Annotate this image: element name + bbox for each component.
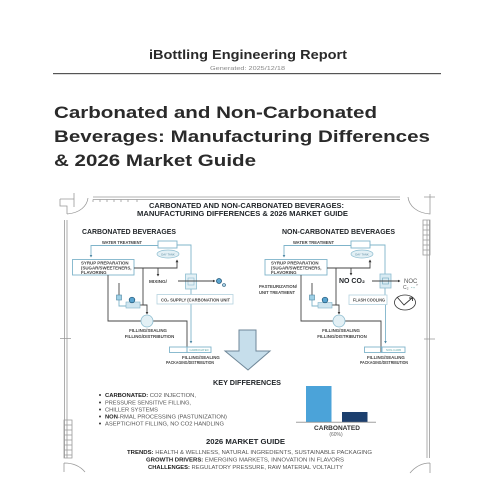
valve and pump icon xyxy=(116,295,140,308)
heading: non-carbonated beverages: NON-CARBONATED BEVERAGES xyxy=(282,227,395,236)
report header: Generated: 2025/12/18 xyxy=(210,66,285,72)
key differences list xyxy=(99,393,227,428)
cooling unit icon xyxy=(372,274,400,288)
no carbon label: ₂ᵧ xyxy=(416,282,418,286)
diagram heading xyxy=(137,201,348,218)
report header: iBottling Engineering Report xyxy=(149,48,348,62)
syrup preparation box: FLAVORING xyxy=(271,270,297,275)
no carbon label: ᵃ ᵠ xyxy=(411,286,415,290)
syrup preparation box: FLAVORING xyxy=(81,270,107,275)
no carbon label: C₂ xyxy=(403,285,409,291)
day tank xyxy=(351,250,373,258)
filling mixer node xyxy=(125,315,174,339)
co2 molecule icon xyxy=(216,278,226,286)
syrup preparation box: SYRUP PREPARATION xyxy=(81,260,129,266)
day tank: DAY TANK xyxy=(355,252,369,256)
day tank xyxy=(157,250,179,258)
diagram heading: CARBONATED AND NON-CARBONATED BEVERAGES: xyxy=(149,201,344,210)
water treatment step: WATER TREATMENT xyxy=(102,240,142,245)
market guide text: CHALLENGES: REGULATORY PRESSURE, RAW MATERIAL VOLTALITY xyxy=(148,465,343,471)
pasteurization label xyxy=(259,284,298,295)
water treatment step: WATER TREATMENT xyxy=(293,240,334,245)
blueprint frame xyxy=(60,193,435,473)
packaging station: NON-CARB xyxy=(386,348,401,352)
filling mixer node: FILLING/SEALING xyxy=(129,328,167,333)
packaging station: FILLING/SEALING xyxy=(367,355,405,360)
filling mixer node: FILLING/DISTRIBUTION xyxy=(125,334,174,339)
water treatment step xyxy=(284,240,370,257)
market guide text xyxy=(127,450,372,471)
key differences heading: KEY DIFFERENCES xyxy=(213,378,281,387)
pasteurization label: PASTEURIZATION/ xyxy=(259,284,298,289)
no co2 label: NO CO₂ xyxy=(339,276,365,285)
pasteurization label: UNIT TREATMENT xyxy=(259,290,295,295)
title: Beverages: Manufacturing Differences xyxy=(54,127,430,146)
packaging station: FILLING/SEALING xyxy=(182,355,220,360)
report header xyxy=(53,48,441,74)
flash cooling box: FLASH COOLING xyxy=(353,298,386,302)
key differences list: NON-RMAL PROCESSING (PASTUNIZATION) xyxy=(105,414,227,420)
no gas icon xyxy=(394,295,416,310)
market guide heading: 2026 MARKET GUIDE xyxy=(206,437,285,446)
syrup preparation box: (SUGAR/SWEETENERS, xyxy=(81,266,132,270)
key differences list: PRESSURE SENSITIVE FILLING, xyxy=(105,400,192,406)
day tank: DAY TANK xyxy=(161,252,175,256)
bar chart: (60%) xyxy=(329,432,343,438)
key differences list: CHILLER SYSTEMS xyxy=(105,408,158,414)
title: Carbonated and Non-Carbonated xyxy=(54,103,377,122)
syrup preparation box xyxy=(72,260,134,275)
packaging station: CARBONATED xyxy=(189,348,209,352)
syrup preparation box xyxy=(265,260,327,275)
filling mixer node xyxy=(317,315,367,339)
mixing label: MIXING/ xyxy=(149,279,168,284)
co2 supply box: CO₂ SUPPLY (CARBONATION UNIT xyxy=(161,298,230,302)
diagram heading: MANUFACTURING DIFFERENCES & 2026 MARKET GUIDE xyxy=(137,209,348,218)
heading: carbonated beverages: CARBONATED BEVERAGES xyxy=(82,227,176,236)
carbonation unit icon xyxy=(178,274,215,289)
packaging station: PACKAGING/DISTRIBUTION xyxy=(360,360,408,365)
title: & 2026 Market Guide xyxy=(54,151,256,170)
packaging station xyxy=(360,347,408,365)
arrow: process to differences xyxy=(225,330,270,370)
key differences list: ASEPTIC/HOT FILLING, NO CO2 HANDLING xyxy=(105,422,224,428)
filling mixer node: FILLING/DISTRIBUTION xyxy=(317,334,367,339)
process lines xyxy=(301,245,386,352)
valve and pump icon xyxy=(310,295,332,308)
no carbon label: NOC xyxy=(404,279,418,285)
bar chart xyxy=(296,386,376,438)
market guide text: GROWTH DRIVERS: EMERGING MARKETS, INNOVATION IN FLAVORS xyxy=(146,458,344,464)
syrup preparation box: SYRUP PREPARATION xyxy=(271,260,319,266)
panel: non-carbonated process xyxy=(259,227,418,365)
packaging station: PACKAGING/DISTRIBUTION xyxy=(166,360,214,365)
no carbon label xyxy=(403,279,418,291)
filling mixer node: FILLING/SEALING xyxy=(322,328,360,333)
co2 supply box xyxy=(157,294,233,304)
flash cooling box xyxy=(349,295,387,304)
process lines xyxy=(108,245,191,352)
packaging station xyxy=(166,347,220,365)
key differences list: CARBONATED: CO2 INJECTION, xyxy=(105,393,197,399)
syrup preparation box: (SUGAR/SWEETENERS, xyxy=(271,266,322,270)
water treatment step xyxy=(91,240,177,257)
title xyxy=(54,103,430,170)
panel: carbonated process xyxy=(72,227,233,365)
bar chart: CARBONATED xyxy=(314,425,360,432)
market guide text: TRENDS: HEALTH & WELLNESS, NATURAL INGREDIENTS, SUSTAINABLE PACKAGING xyxy=(127,450,372,456)
